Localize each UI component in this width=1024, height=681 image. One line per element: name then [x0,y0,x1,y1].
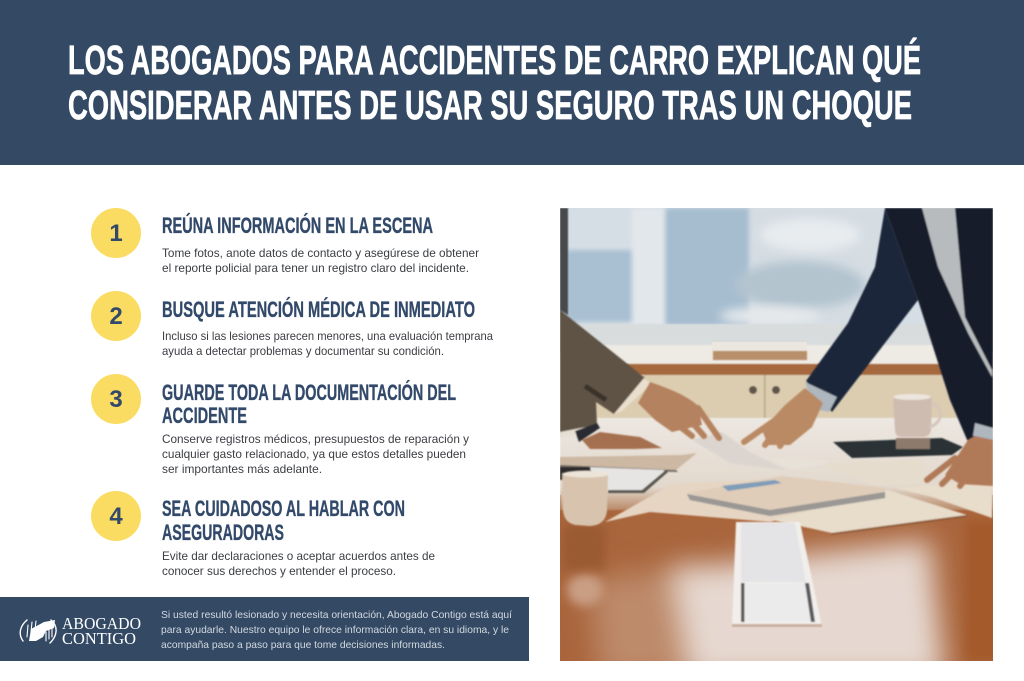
window sill and books [600,342,945,365]
step 4 text [162,549,435,578]
raised paper [694,432,779,468]
title [68,37,921,128]
step 4 heading: SEA CUIDADOSO AL HABLAR CON [162,496,405,521]
number badge 4 [91,491,141,541]
right hand pointing [744,388,823,446]
step 3 heading [162,380,456,428]
step 2 heading: BUSQUE ATENCIÓN MÉDICA DE INMEDIATO [162,297,475,322]
folder stack [687,476,885,516]
step 3 text [162,432,469,476]
step 3 heading: ACCIDENTE [162,403,247,428]
logo wordmark [62,614,141,648]
number badge 1 [91,208,141,258]
papers spread on table [605,481,993,535]
left mug [562,470,609,526]
right person torso and arm [744,208,993,486]
step 4 text: conocer sus derechos y entender el proceso. [162,564,396,578]
left notebook and tablet [560,453,697,493]
number badge 1: 1 [109,220,123,247]
number badge 2 [91,291,141,341]
table [560,418,1005,680]
number badge 3 [91,374,141,424]
step 2 text [162,329,493,358]
footer text [161,609,512,651]
step 3 [91,374,469,476]
right hand on table [927,436,993,486]
left hand pointing [638,382,719,438]
number badge 3: 3 [109,386,123,413]
right mug [893,394,941,437]
step 4 heading: ASEGURADORAS [162,520,284,545]
cabinet [590,364,962,419]
step 2 text: ayuda a detectar problemas y documentar su condición. [162,344,444,358]
step 1 text: el reporte policial para tener un registro claro del incidente. [162,261,469,275]
step 3 heading: GUARDE TODA LA DOCUMENTACIÓN DEL [162,380,456,405]
number badge 2: 2 [109,303,123,330]
footer panel [0,597,529,661]
step 4 heading [162,496,405,545]
logo wordmark: ABOGADO [62,614,141,633]
step 3 text: ser importantes más adelante. [162,462,322,476]
photo: business people reviewing documents at a table [560,208,1005,680]
right tablet [833,438,963,458]
footer text: Si usted resultó lesionado y necesita orientación, Abogado Contigo está aquí [161,609,512,621]
step 2 [91,291,493,358]
step 2 text: Incluso si las lesiones parecen menores, una evaluación temprana [162,329,493,343]
step 1 heading: REÚNA INFORMACIÓN EN LA ESCENA [162,213,433,238]
footer text: acompaña paso a paso para que tome decisiones informadas. [161,639,445,651]
step 4 text: Evite dar declaraciones o aceptar acuerdos antes de [162,549,435,563]
step 1 text: Tome fotos, anote datos de contacto y asegúrese de obtener [162,246,479,260]
window view [560,208,993,353]
step 4 [91,491,435,578]
header band [0,0,1024,165]
step 1 text [162,246,479,275]
step 3 text: Conserve registros médicos, presupuestos de reparación y [162,432,469,446]
white device in table [732,522,822,627]
logo wordmark: CONTIGO [62,629,136,648]
left person arm [560,208,719,449]
step 3 text: cualquier gasto relacionado, ya que estos detalles pueden [162,447,466,461]
step 1 [91,208,479,275]
logo [20,614,141,648]
footer text: para ayudarle. Nuestro equipo le ofrece información clara, en su idioma, y le [161,624,509,636]
icon: clasped hands [20,620,56,643]
number badge 4: 4 [109,503,123,530]
